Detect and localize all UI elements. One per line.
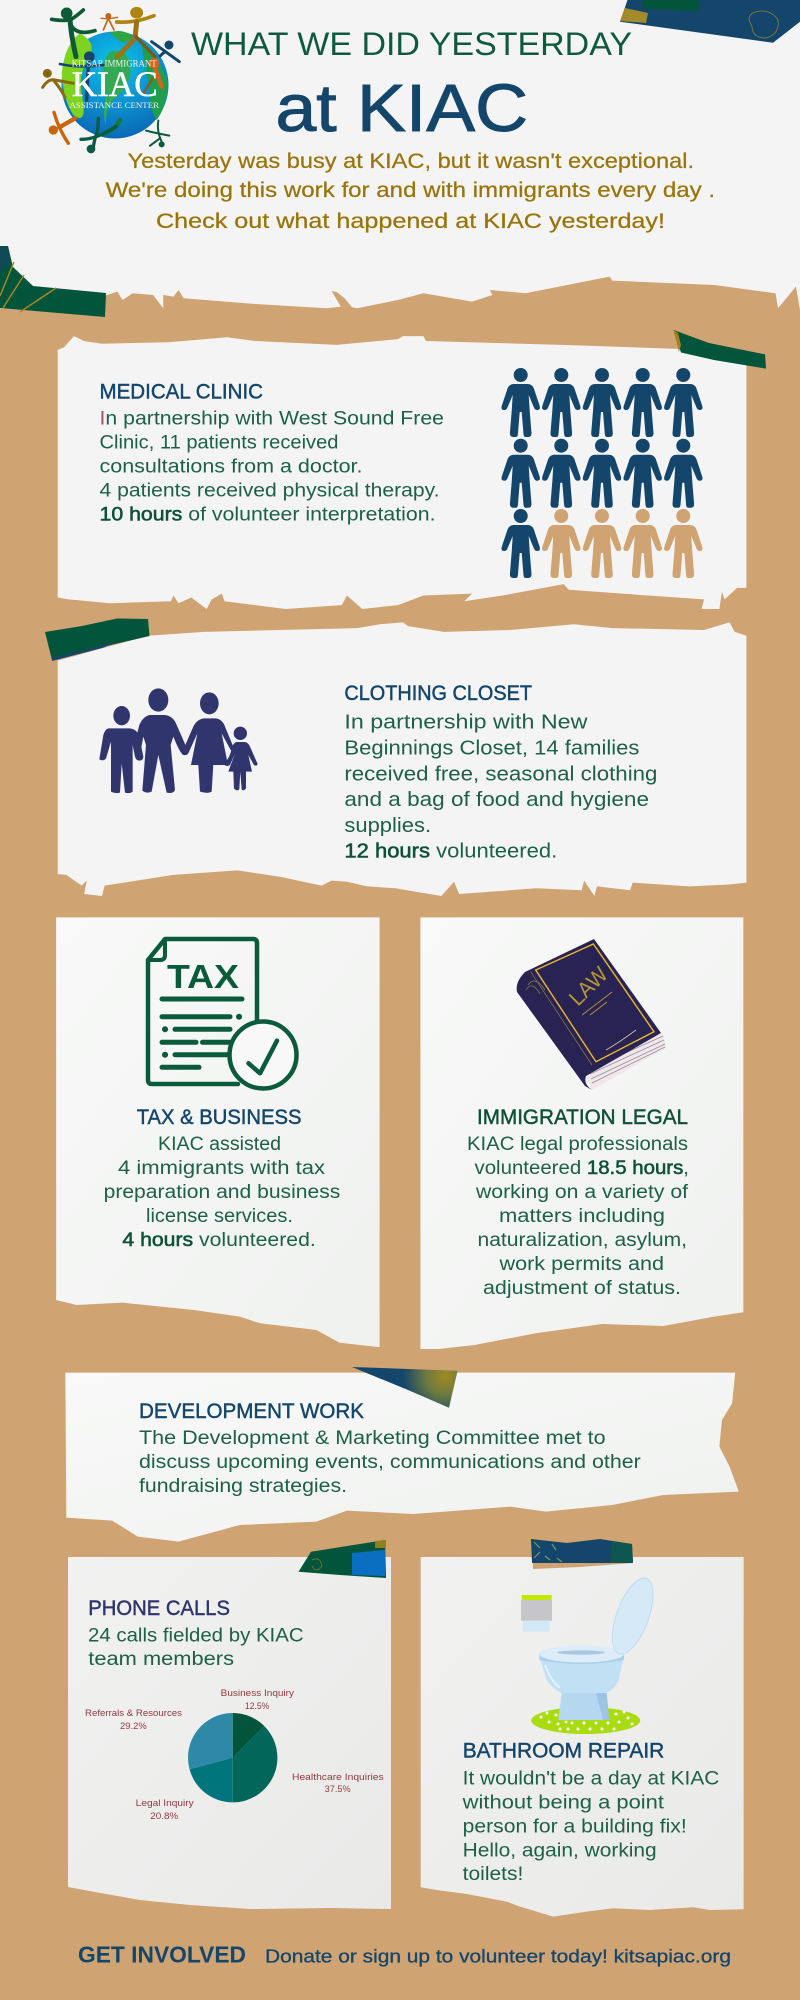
label: referrals and resources: 29.2% bbox=[120, 1721, 147, 1731]
label: business inquiry: Business Inquiry bbox=[221, 1688, 295, 1698]
text: medical clinic: 4 patients received physical therapy. bbox=[100, 480, 440, 501]
label: legal inquiry bbox=[136, 1798, 194, 1821]
logo: KIAC globe with people: ASSISTANCE CENTER bbox=[70, 100, 159, 110]
text: development work: fundraising strategies. bbox=[139, 1476, 347, 1497]
text: phone calls bbox=[88, 1626, 304, 1670]
slice: business inquiry bbox=[233, 1713, 264, 1758]
text: immigration legal: volunteered 18.5 hours , bbox=[474, 1158, 689, 1179]
text: immigration legal bbox=[467, 1134, 689, 1299]
text: tax and business: license services. bbox=[146, 1206, 293, 1227]
heading: medical clinic: MEDICAL CLINIC bbox=[100, 380, 263, 404]
label: healthcare inquiries bbox=[292, 1772, 384, 1794]
icon: 15 people pictogram bbox=[501, 368, 703, 578]
intro text: Yesterday was busy at KIAC, but it wasn't exceptional. bbox=[128, 149, 694, 173]
heading: clothing closet: CLOTHING CLOSET bbox=[344, 682, 532, 705]
icon: tax document with check: TAX bbox=[167, 959, 240, 996]
text: phone calls: 24 calls fielded by KIAC bbox=[88, 1626, 304, 1647]
text: bathroom repair: toilets! bbox=[463, 1864, 523, 1885]
panel: phone calls bbox=[68, 1557, 391, 1909]
heading: bathroom repair: BATHROOM REPAIR bbox=[463, 1740, 664, 1763]
intro text: Check out what happened at KIAC yesterday! bbox=[156, 209, 665, 233]
title line 2: at KIAC bbox=[276, 71, 528, 146]
label: referrals and resources: Referrals & Resources bbox=[85, 1708, 183, 1718]
label: legal inquiry: 20.8% bbox=[150, 1811, 178, 1821]
label: business inquiry: 12.5% bbox=[245, 1701, 269, 1711]
text: clothing closet: and a bag of food and hygiene bbox=[344, 789, 649, 811]
text: medical clinic: Clinic, 11 patients received bbox=[100, 433, 338, 454]
slice: legal inquiry bbox=[190, 1758, 233, 1802]
text: tax and business: preparation and business bbox=[104, 1182, 340, 1203]
icon: law book: LAW bbox=[564, 962, 613, 1011]
pie chart: call types bbox=[85, 1688, 384, 1821]
text: tax and business: 4 immigrants with tax bbox=[118, 1158, 326, 1179]
tape: top right bbox=[620, 0, 800, 43]
logo: KIAC globe with people: KIAC bbox=[72, 64, 158, 104]
panel: clothing closet bbox=[58, 622, 746, 896]
text: clothing closet: 12 hours volunteered. bbox=[344, 841, 557, 863]
text: immigration legal: work permits and bbox=[498, 1254, 664, 1275]
tape: phone calls bbox=[298, 1540, 386, 1578]
text: bathroom repair: Hello, again, working bbox=[463, 1841, 657, 1862]
text: bathroom repair: without being a point bbox=[462, 1792, 665, 1813]
logo: KIAC globe with people: KITSAP IMMIGRANT bbox=[72, 60, 157, 70]
text: clothing closet: supplies. bbox=[344, 815, 431, 837]
text: development work bbox=[139, 1428, 642, 1497]
label: legal inquiry: Legal Inquiry bbox=[136, 1798, 194, 1808]
label: business inquiry bbox=[221, 1688, 295, 1711]
text: clothing closet bbox=[344, 711, 657, 863]
text: bathroom repair bbox=[462, 1768, 719, 1885]
text: clothing closet: received free, seasonal clothing bbox=[344, 763, 657, 785]
text: tax and business: KIAC assisted bbox=[158, 1134, 281, 1155]
intro text bbox=[106, 149, 715, 233]
heading: phone calls: PHONE CALLS bbox=[88, 1597, 230, 1620]
icon: tax document with check bbox=[148, 939, 296, 1088]
slice: referrals and resources bbox=[188, 1713, 233, 1769]
text: tax and business: 4 hours volunteered. bbox=[122, 1230, 316, 1251]
logo: KIAC globe with people bbox=[43, 9, 179, 152]
tape: medical clinic bbox=[674, 330, 766, 369]
tape: clothing closet bbox=[45, 618, 150, 661]
text: immigration legal: KIAC legal professionals bbox=[467, 1134, 688, 1155]
tape: development work bbox=[352, 1367, 458, 1408]
panel: medical clinic bbox=[58, 336, 746, 609]
tape: bathroom repair bbox=[531, 1539, 633, 1569]
icon: law book bbox=[517, 939, 666, 1090]
text: medical clinic: 10 hours of volunteer interpretation. bbox=[100, 504, 436, 526]
title line 1: WHAT WE DID YESTERDAY bbox=[191, 26, 632, 62]
text: immigration legal: working on a variety of bbox=[475, 1182, 689, 1203]
text: clothing closet: Beginnings Closet, 14 families bbox=[344, 737, 639, 759]
panel: development work bbox=[65, 1373, 739, 1542]
text: medical clinic: In partnership with West Sound Free bbox=[100, 408, 444, 430]
text: immigration legal: adjustment of status. bbox=[483, 1278, 681, 1299]
text: immigration legal: matters including bbox=[499, 1206, 665, 1227]
label: referrals and resources bbox=[85, 1708, 183, 1731]
text: bathroom repair: It wouldn't be a day at KIAC bbox=[463, 1768, 719, 1789]
tape: left bbox=[0, 246, 106, 317]
heading: immigration legal: IMMIGRATION LEGAL bbox=[477, 1106, 688, 1129]
intro text: We're doing this work for and with immigrants every day . bbox=[106, 178, 715, 202]
panel: bathroom repair bbox=[421, 1557, 744, 1917]
footer: call to action bbox=[78, 1942, 731, 1968]
text: medical clinic bbox=[100, 408, 444, 526]
text: medical clinic: consultations from a doctor. bbox=[100, 456, 362, 477]
text: immigration legal: naturalization, asylum, bbox=[478, 1230, 687, 1251]
text: clothing closet: In partnership with New bbox=[344, 711, 588, 733]
heading: development work: DEVELOPMENT WORK bbox=[139, 1400, 364, 1423]
text: tax and business bbox=[104, 1134, 340, 1251]
icon: toilet with mat and paper bbox=[521, 1573, 661, 1734]
heading: tax and business: TAX & BUSINESS bbox=[137, 1106, 302, 1129]
footer: call to action: GET INVOLVED bbox=[78, 1942, 246, 1968]
header panel bbox=[0, 0, 800, 310]
slice: healthcare inquiries bbox=[233, 1726, 277, 1802]
footer: call to action: Donate or sign up to volunteer today! kitsapiac.org bbox=[265, 1947, 731, 1967]
icon: family silhouette bbox=[99, 688, 258, 793]
text: development work: discuss upcoming events, communications and other bbox=[139, 1452, 642, 1473]
panel: tax and business bbox=[56, 917, 380, 1347]
text: phone calls: team members bbox=[88, 1649, 234, 1670]
text: bathroom repair: person for a building fix! bbox=[463, 1816, 687, 1837]
text: development work: The Development & Marketing Committee met to bbox=[139, 1428, 606, 1449]
label: healthcare inquiries: 37.5% bbox=[325, 1784, 351, 1794]
panel: immigration legal bbox=[420, 917, 743, 1349]
label: healthcare inquiries: Healthcare Inquiries bbox=[292, 1772, 384, 1782]
